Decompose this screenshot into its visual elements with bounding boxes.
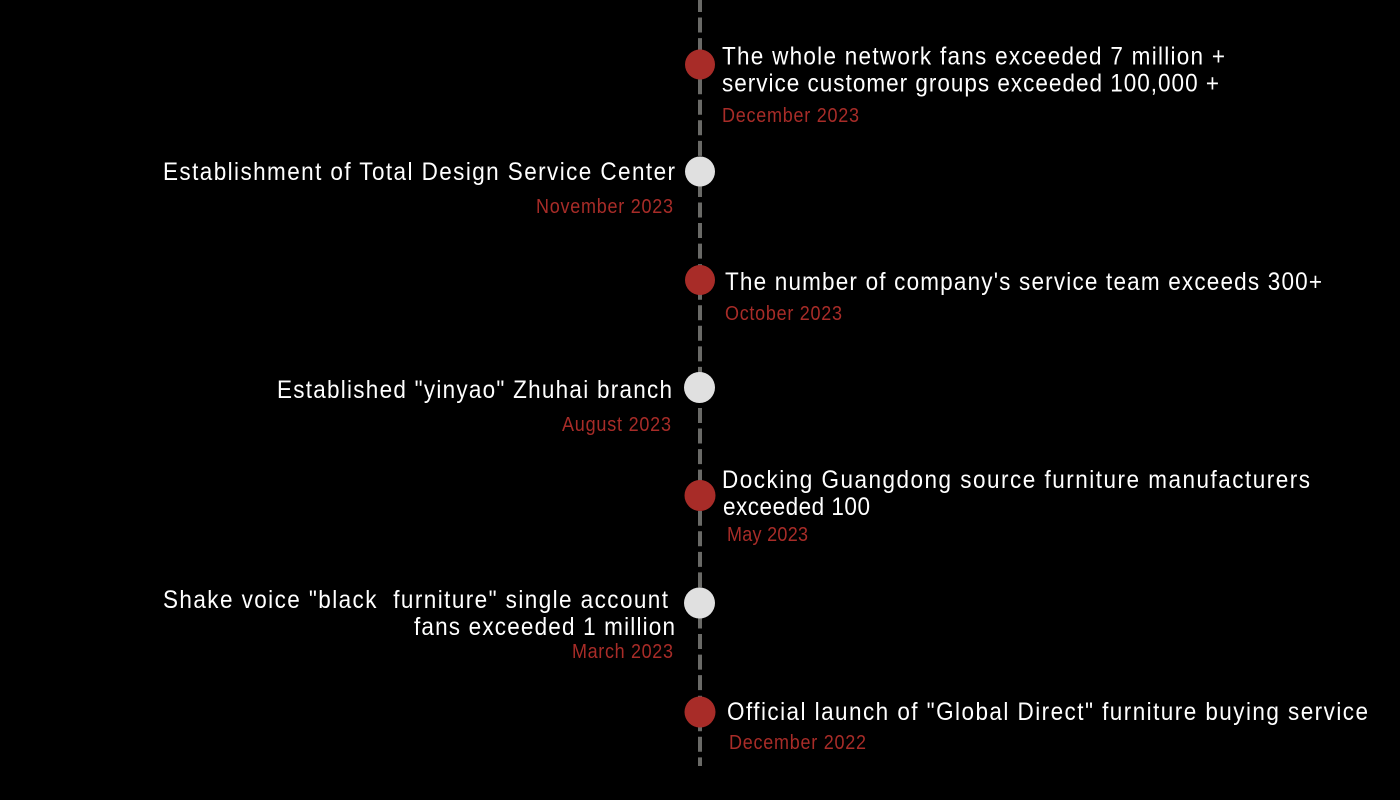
milestone: October 2023 [685, 265, 1322, 325]
date: March 2023: March 2023 [572, 641, 673, 663]
date: May 2023: May 2023 [727, 524, 808, 546]
date: November 2023: November 2023 [536, 196, 673, 218]
milestone: March 2023 [163, 586, 715, 663]
text: May 2023 milestone: Docking Guangdong source furniture manufacturers [722, 466, 1310, 494]
text: May 2023 milestone: exceeded 100 [723, 493, 870, 521]
text: December 2023 milestone [722, 42, 1225, 98]
marker: December 2022 [684, 696, 716, 728]
marker: November 2023 [685, 156, 715, 186]
milestone: December 2022 [684, 696, 1368, 754]
marker: March 2023 [684, 588, 715, 618]
text: May 2023 milestone [722, 466, 1310, 521]
milestone: May 2023 [684, 466, 1310, 546]
text: March 2023 milestone [163, 586, 675, 641]
text: March 2023 milestone: fans exceeded 1 million [414, 613, 675, 641]
marker: May 2023 [684, 480, 716, 511]
text: December 2023 milestone: The whole network fans exceeded 7 million + [722, 42, 1225, 71]
text: December 2022 milestone: Official launch of "Global Direct" furniture buying service [727, 698, 1368, 726]
milestone: November 2023 [163, 156, 715, 218]
date: August 2023: August 2023 [562, 414, 671, 436]
marker: October 2023 [685, 265, 715, 295]
text: November 2023 milestone: Establishment of Total Design Service Center [163, 158, 675, 186]
text: December 2023 milestone: service customer groups exceeded 100,000 + [722, 69, 1219, 98]
marker: August 2023 [684, 372, 715, 403]
marker: December 2023 [685, 50, 715, 80]
timeline dashed axis [698, 0, 702, 766]
date: December 2022: December 2022 [729, 732, 866, 754]
date: October 2023: October 2023 [725, 303, 842, 325]
text: August 2023 milestone: Established "yinyao" Zhuhai branch [277, 376, 672, 404]
milestone: December 2023 [685, 42, 1225, 127]
text: October 2023 milestone: The number of company's service team exceeds 300+ [725, 268, 1322, 296]
milestone: August 2023 [277, 372, 715, 436]
date: December 2023: December 2023 [722, 105, 859, 127]
text: March 2023 milestone: Shake voice "black furniture" single account [163, 586, 668, 614]
